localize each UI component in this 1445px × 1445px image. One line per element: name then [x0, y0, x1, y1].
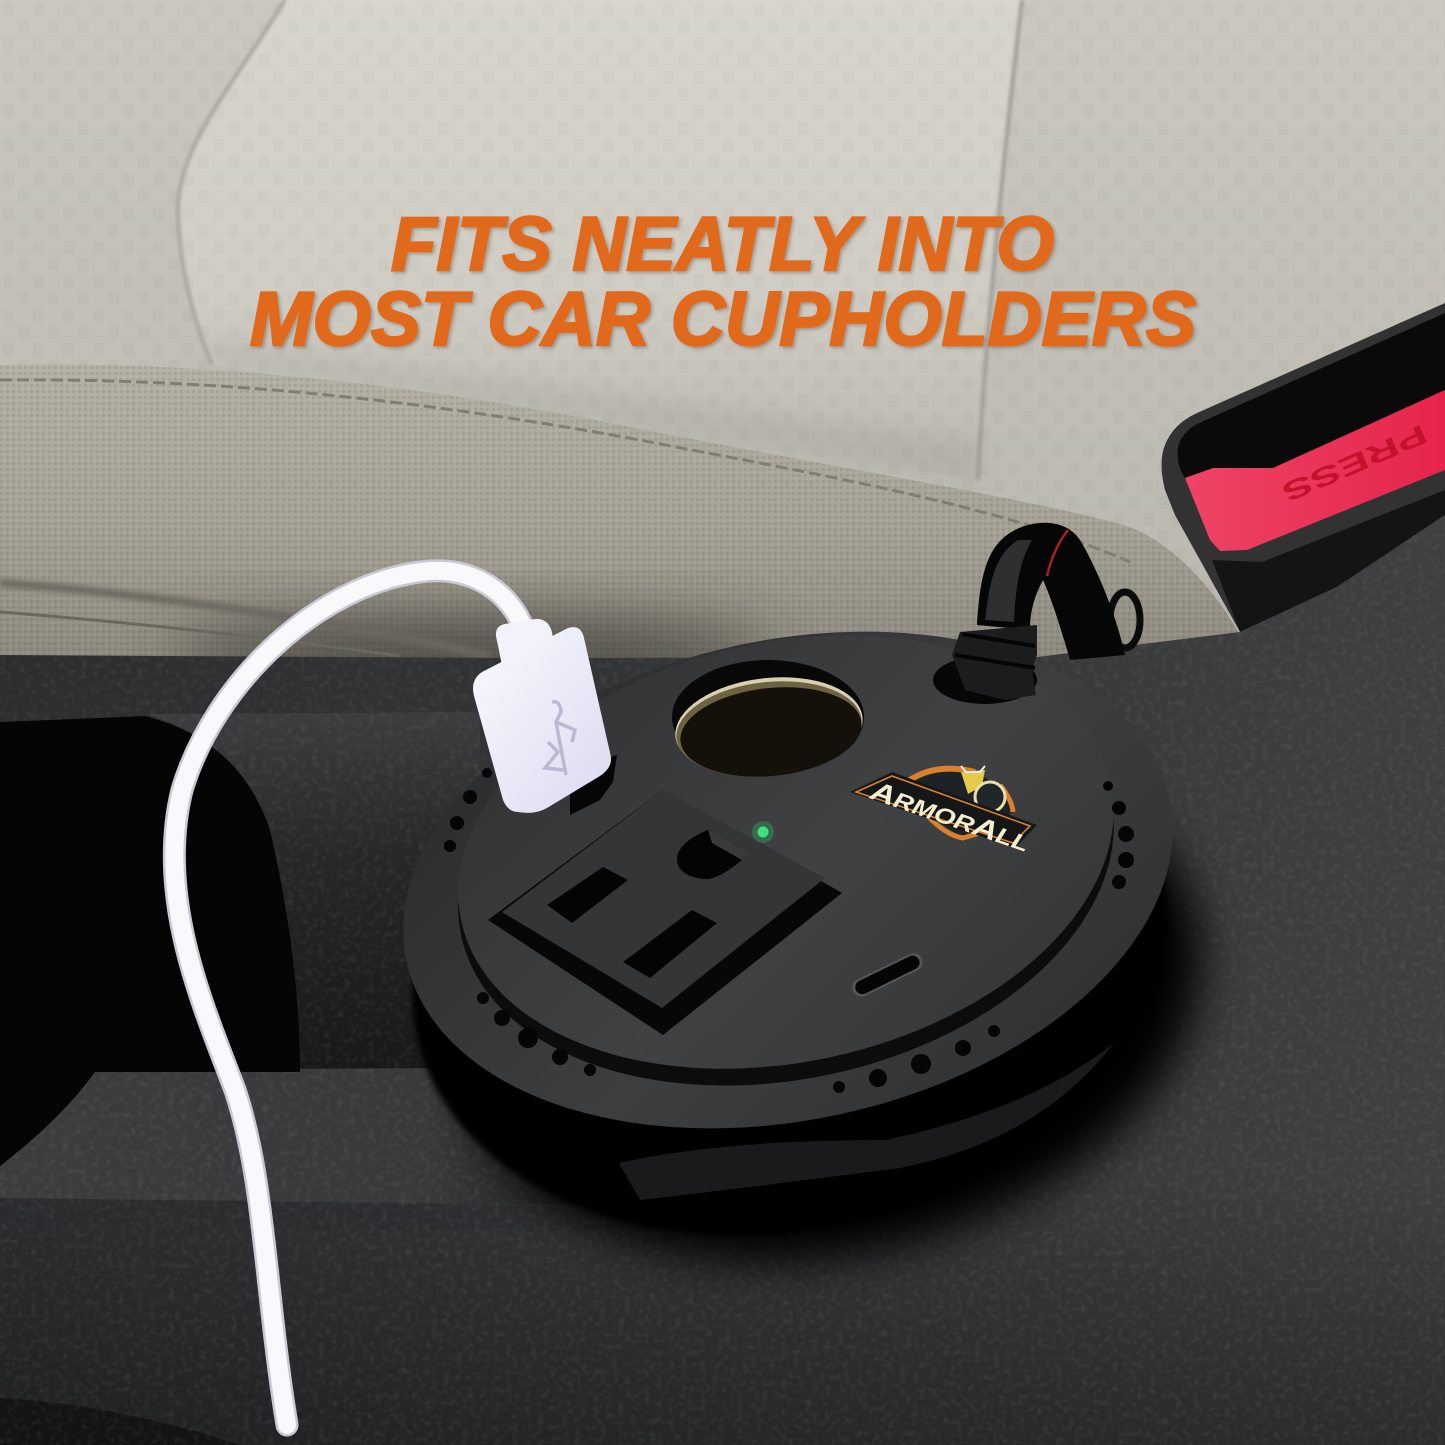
console surface [0, 515, 1445, 1445]
logo: Armor All: ARMOR ALL [866, 775, 1034, 858]
seat cushion [0, 364, 1240, 693]
cord grommet and cable [933, 523, 1140, 704]
USB port slot [570, 755, 617, 815]
vent holes [444, 768, 1134, 1093]
top disc [417, 578, 1155, 1143]
cupholder well [0, 716, 300, 1166]
seat back [0, 0, 1445, 680]
USB-C port [849, 950, 926, 1000]
seat belt buckle [1162, 303, 1445, 632]
seat centre panel [178, 0, 1022, 480]
title [250, 202, 1196, 362]
power LED [752, 821, 774, 843]
lower ring [357, 564, 1219, 1196]
USB cable [174, 571, 525, 1425]
cupholder divider [0, 712, 700, 1445]
leather texture [0, 526, 1445, 1445]
USB plug [473, 619, 611, 813]
title: FITS NEATLY INTO [391, 202, 1054, 287]
base shadow [410, 673, 1250, 1327]
inverter [357, 523, 1250, 1327]
buckle label: PRESS [1277, 418, 1432, 508]
AC outlet [488, 790, 842, 1035]
title: MOST CAR CUPHOLDERS [250, 277, 1196, 362]
cigarette socket [670, 660, 868, 786]
